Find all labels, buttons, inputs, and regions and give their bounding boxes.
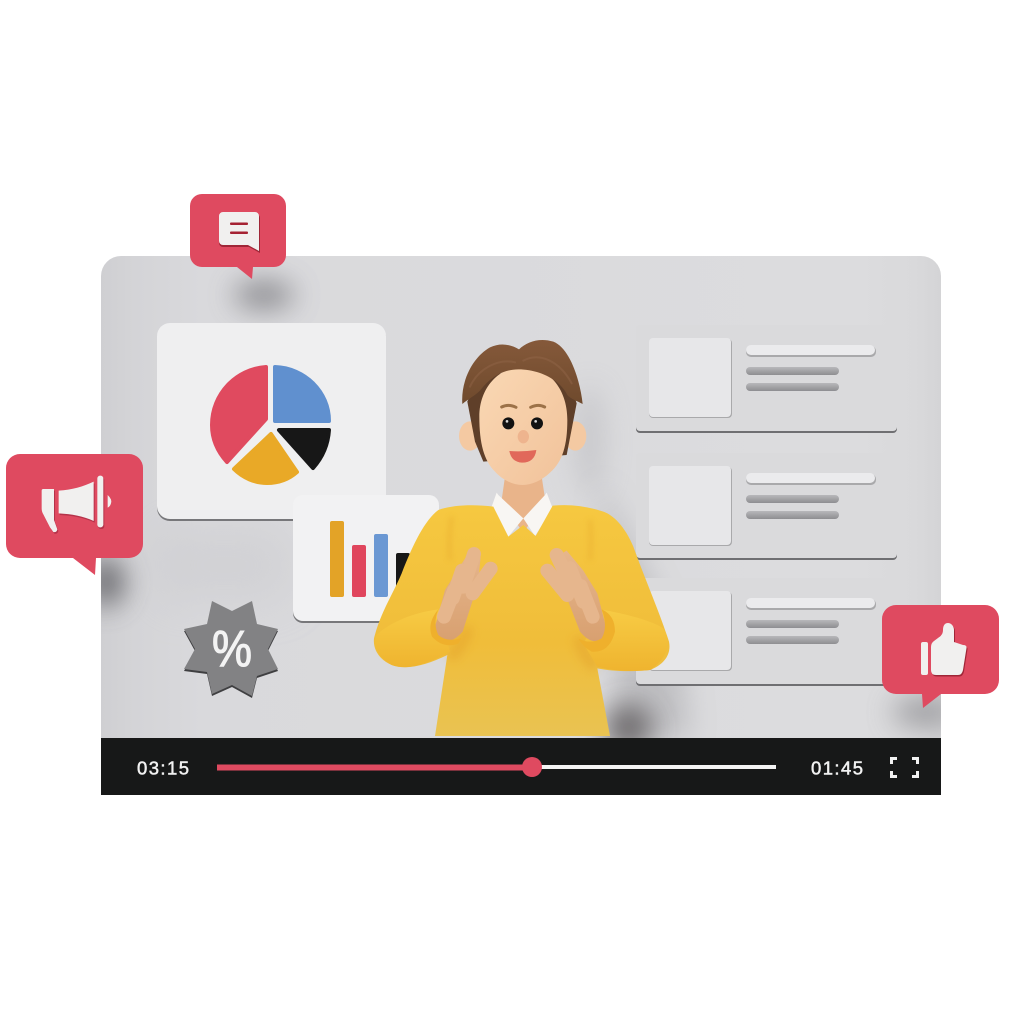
pie chart (212, 367, 329, 483)
progress knob (522, 757, 542, 777)
remaining time: 01:45 (811, 758, 863, 778)
bar chart (330, 521, 410, 597)
progress track (530, 765, 776, 769)
list card 2 (636, 453, 897, 560)
icon: fullscreen (892, 758, 918, 776)
panel: video screen (88, 256, 957, 752)
elapsed time: 03:15 (137, 758, 189, 778)
panel: bar chart card (293, 495, 439, 623)
bubble: chat (190, 194, 286, 279)
right cuff (578, 609, 615, 652)
list card 1 (636, 325, 897, 433)
icon: percent badge (184, 601, 278, 698)
player control bar (101, 738, 941, 795)
back hair (467, 373, 577, 462)
person (374, 340, 669, 736)
eyebrows (502, 405, 545, 407)
sweater (374, 505, 669, 736)
sweater shading (449, 517, 597, 667)
icon: percent badge: % (212, 620, 252, 677)
hair (462, 340, 583, 404)
ears (459, 421, 586, 451)
bubble: thumbs up (882, 605, 999, 708)
hair strands (470, 357, 572, 387)
eyes (502, 417, 543, 429)
right forearm (583, 610, 668, 671)
bubble: megaphone (6, 454, 143, 575)
collar (492, 493, 553, 537)
list card 3 (636, 578, 897, 686)
left forearm (375, 609, 450, 667)
progress played (217, 764, 532, 770)
left hand (435, 551, 491, 641)
neck (502, 477, 545, 533)
icon: thumbs up (921, 623, 968, 676)
panel: pie chart card (157, 323, 386, 521)
nose (518, 430, 529, 443)
left cuff (430, 609, 461, 645)
icon: chat message (219, 212, 260, 253)
mouth (509, 450, 536, 463)
icon: megaphone (42, 476, 111, 534)
right hand (547, 551, 606, 641)
face (479, 367, 567, 485)
